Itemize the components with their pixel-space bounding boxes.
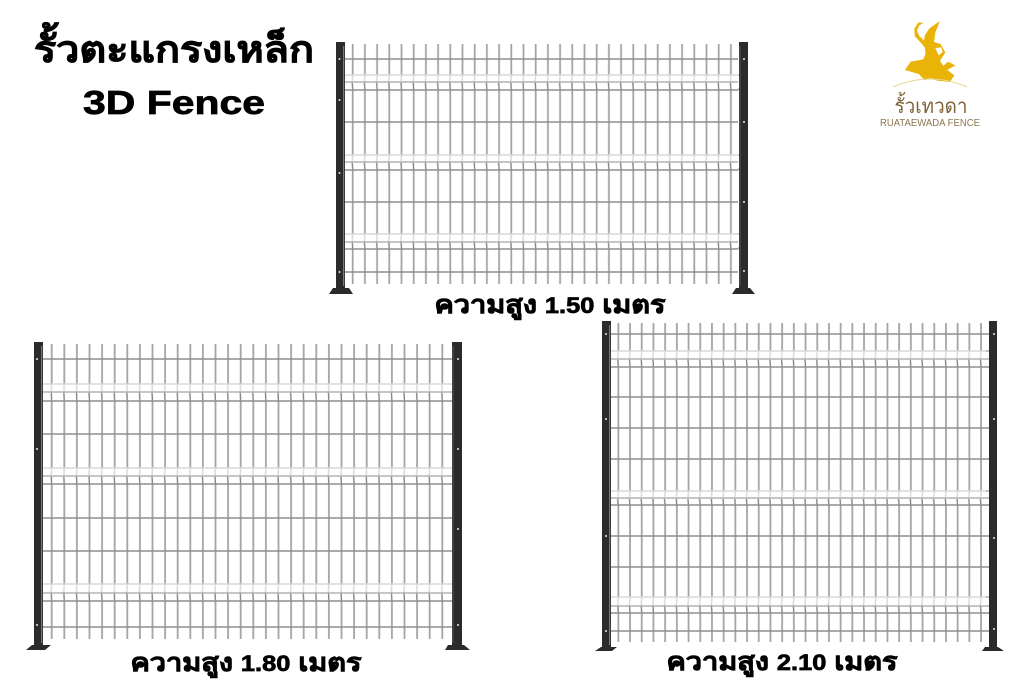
icon: golden dancer	[905, 21, 955, 82]
fence: 1.50 m	[329, 42, 755, 294]
label: height 1.50 m: ความสูง 1.50 เมตร	[434, 291, 666, 321]
right post	[982, 321, 1004, 651]
fence: 2.10 m	[595, 321, 1004, 651]
logo: Ruataewada Fence	[880, 21, 980, 129]
left post	[329, 42, 353, 294]
fence: 1.80 m	[26, 342, 470, 650]
label: height 1.80 m: ความสูง 1.80 เมตร	[130, 649, 362, 679]
logo Thai name: รั้วเทวดา	[894, 92, 968, 118]
right post	[732, 42, 755, 294]
left post	[26, 342, 51, 650]
label: height 2.10 m: ความสูง 2.10 เมตร	[666, 648, 898, 678]
logo English name: RUATAEWADA FENCE	[880, 117, 980, 129]
title: 3D Fence: 3D Fence	[83, 84, 265, 121]
wire mesh	[37, 344, 458, 639]
title: Thai heading: รั้วตะแกรงเหล็ก	[34, 22, 314, 70]
wire mesh	[340, 44, 744, 284]
right post	[445, 342, 470, 650]
logo arc	[893, 79, 967, 87]
left post	[595, 321, 617, 651]
wire mesh	[606, 323, 994, 642]
